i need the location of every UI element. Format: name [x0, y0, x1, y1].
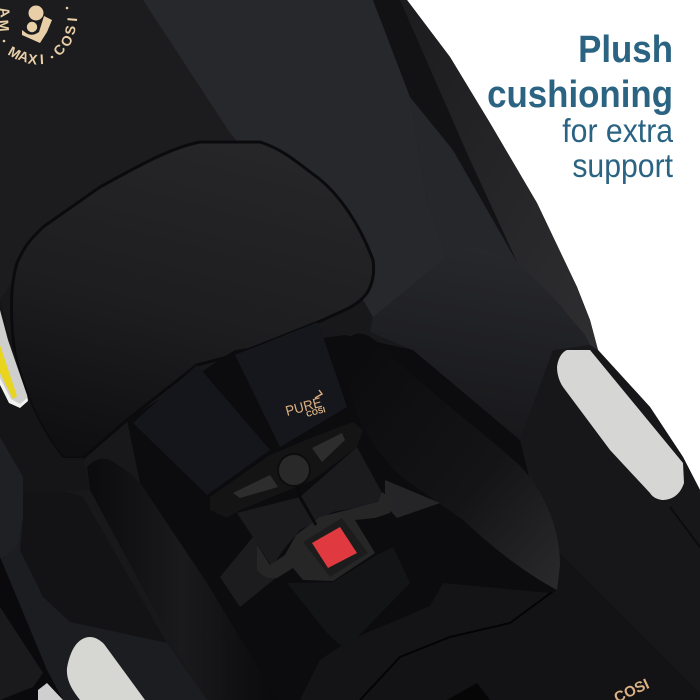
right shoulder cushion	[370, 247, 590, 440]
right harness strap pad: PURE	[284, 395, 323, 419]
buckle housing	[257, 492, 392, 581]
right side panel	[520, 350, 700, 693]
left side lump	[0, 437, 23, 560]
inner right bolster	[345, 333, 560, 590]
wing panel	[410, 97, 517, 262]
heading: plush cushioning: Plush	[578, 28, 673, 70]
right harness strap pad: COSI	[305, 405, 326, 419]
subheading: for extra support: for extra	[562, 112, 673, 149]
left plastic base	[0, 557, 63, 700]
dark piping band	[373, 0, 517, 262]
logo badge: I	[39, 51, 44, 67]
seat bottom	[360, 550, 700, 700]
left harness strap pad	[133, 365, 270, 495]
logo badge: A	[16, 47, 31, 66]
logo badge: O	[57, 32, 76, 49]
right webbing strap	[385, 480, 440, 518]
upper centre panel	[143, 0, 447, 317]
logo badge: C	[50, 41, 69, 59]
right grey handle	[557, 350, 684, 500]
right harness strap pad	[235, 322, 347, 447]
red buckle button	[312, 527, 357, 568]
logo badge: M	[5, 43, 24, 63]
outer plastic shell	[398, 0, 598, 350]
subheading: for extra support: support	[572, 147, 673, 184]
heading: plush cushioning: cushioning	[487, 72, 673, 114]
left webbing strap	[220, 537, 277, 607]
logo badge: S	[61, 24, 79, 36]
seat well	[127, 335, 557, 700]
head cushion	[11, 142, 374, 458]
left edge fabric	[0, 300, 90, 493]
logo badge: I	[64, 17, 80, 22]
subheading: for extra support	[562, 112, 674, 184]
upper left panel with logo ground	[0, 0, 260, 300]
chest clip	[210, 422, 363, 525]
satin webbing under clip	[237, 447, 382, 567]
lower left panel	[0, 491, 207, 700]
crotch strap	[287, 547, 410, 650]
logo badge	[0, 6, 80, 68]
inner left bolster	[87, 459, 277, 700]
left grey handle	[67, 637, 145, 700]
heading: plush cushioning	[487, 28, 673, 115]
yellow label on left edge	[0, 310, 28, 408]
logo badge: X	[27, 50, 39, 68]
seat well lower strip	[300, 583, 552, 700]
